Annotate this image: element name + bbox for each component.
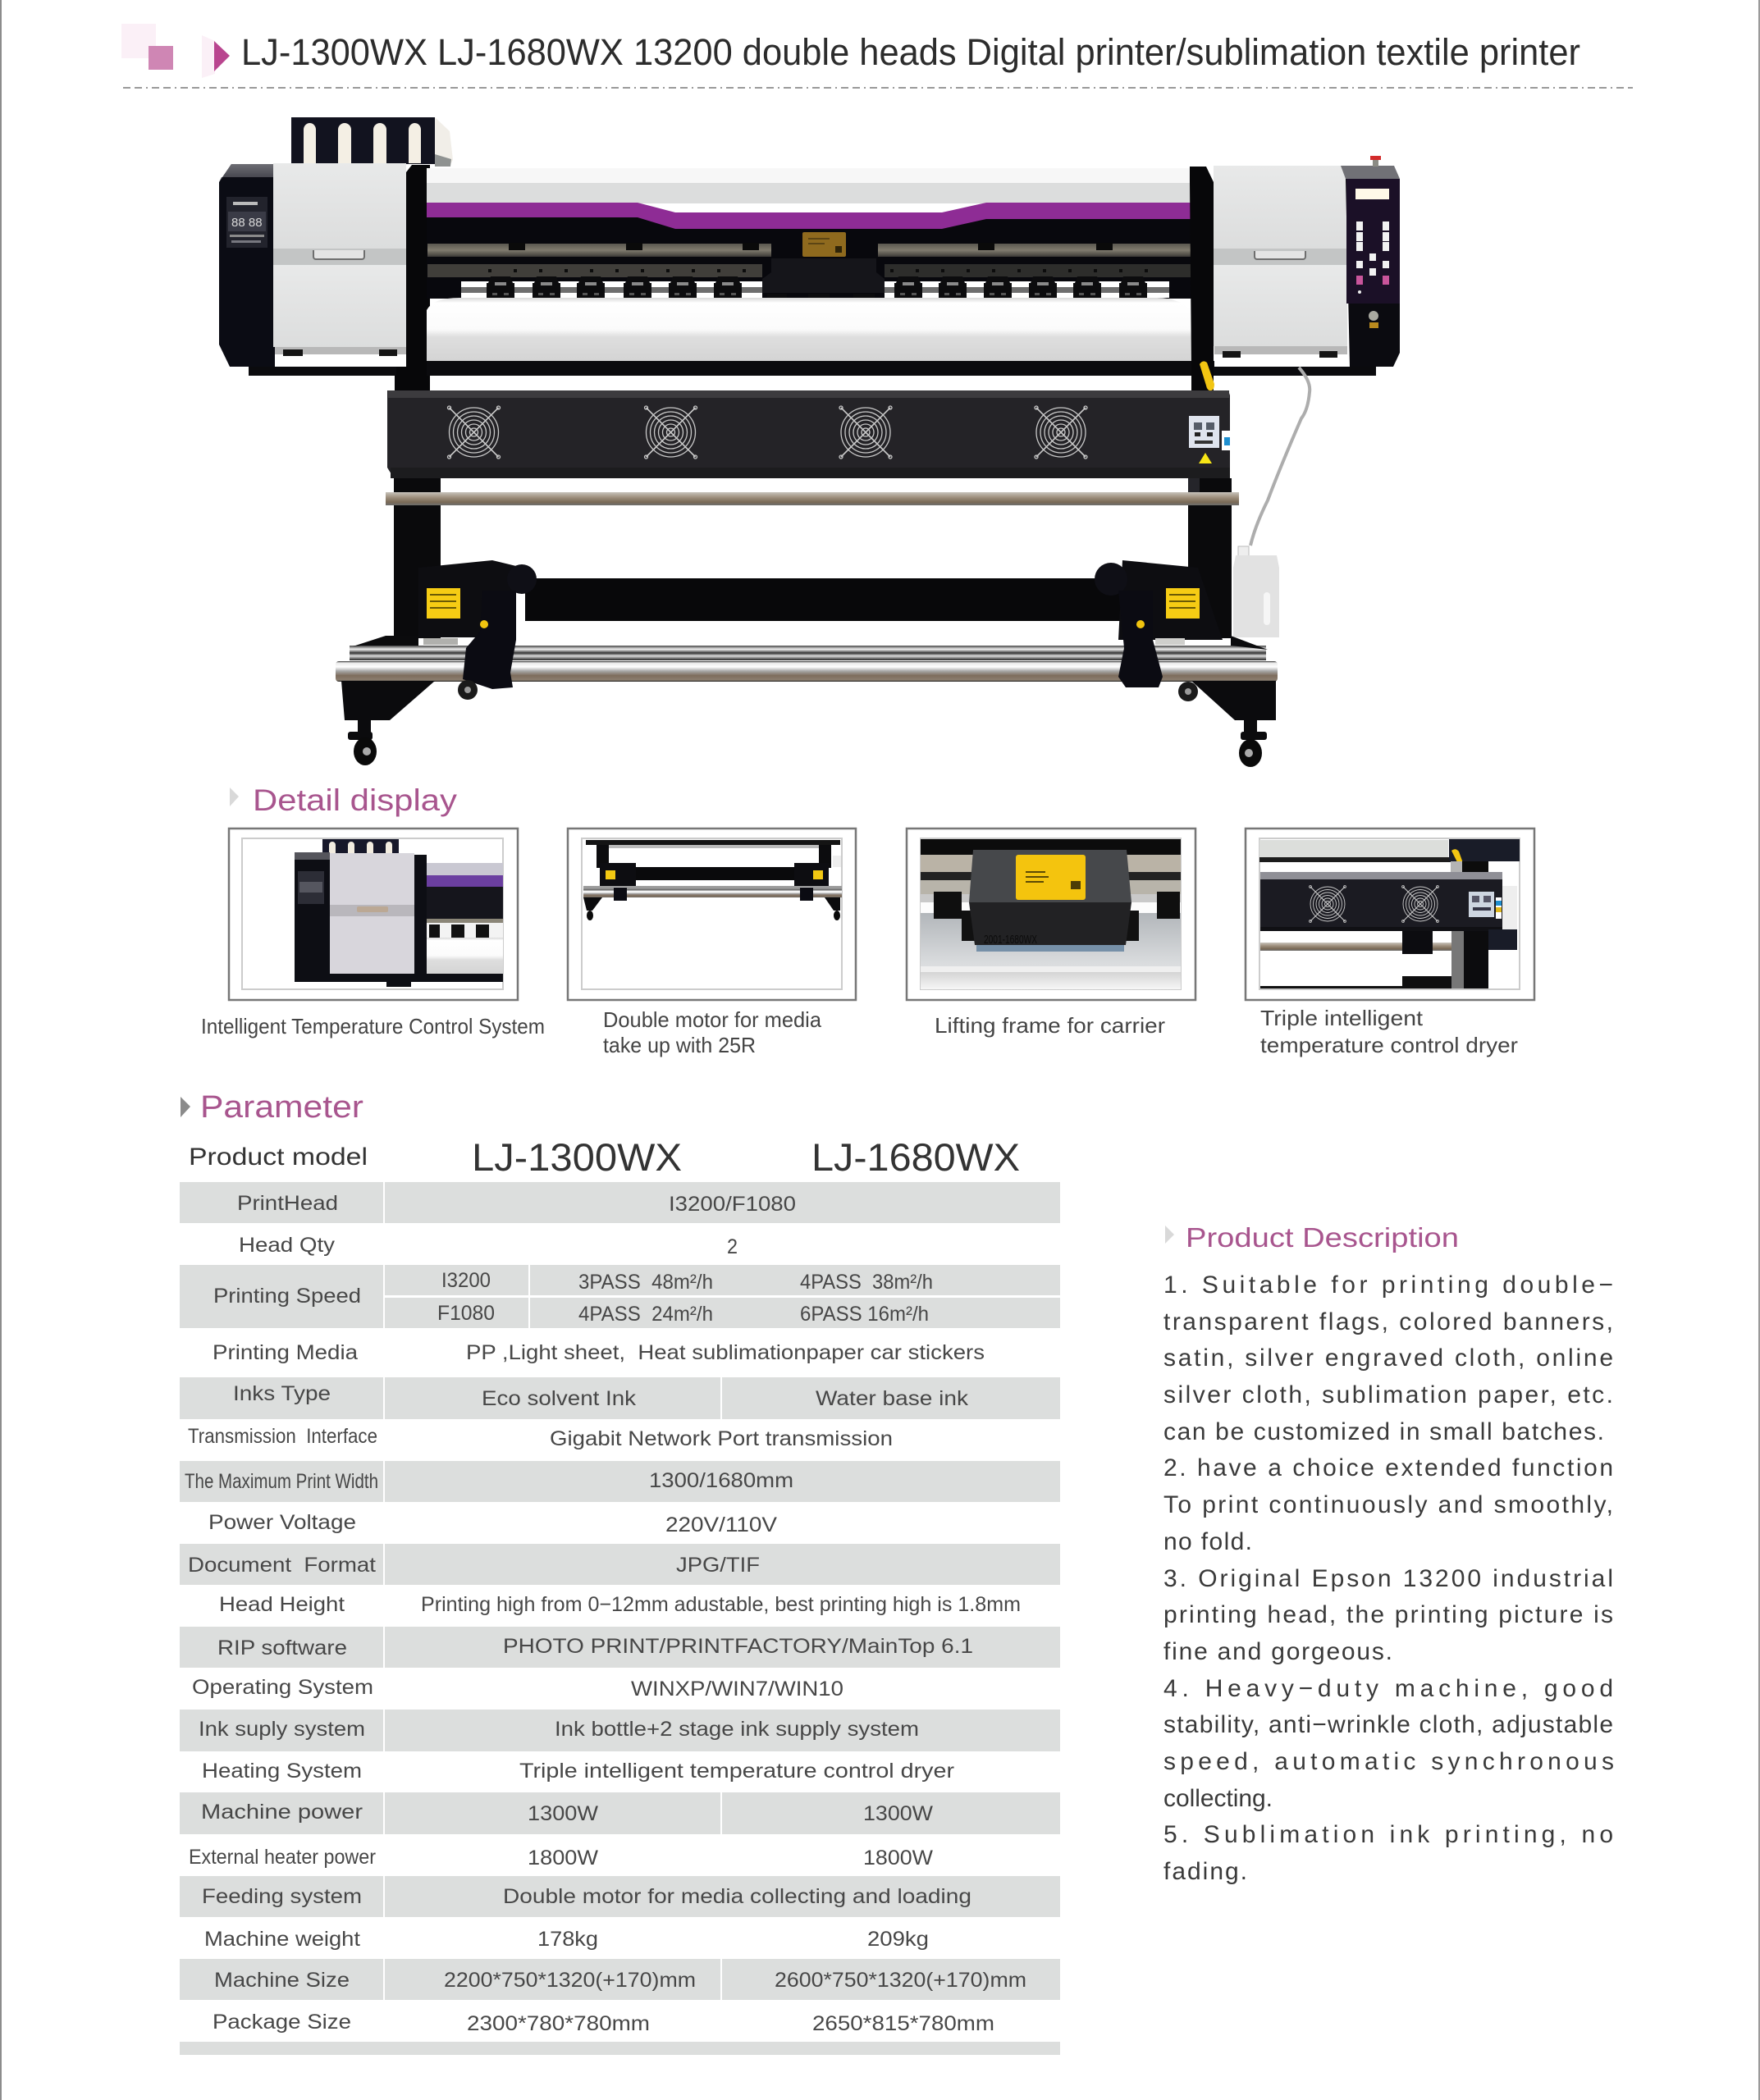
left door [273, 163, 408, 356]
table row: PrintHead: PrintHead [237, 1192, 338, 1215]
product description text: 4. Heavy−duty machine, good [1163, 1675, 1613, 1702]
table row: Package Size: 2650*815*780mm [812, 2012, 994, 2035]
table row: Machine power: 1300W [863, 1802, 933, 1825]
table row: Inks Type: Eco solvent Ink [482, 1387, 637, 1410]
table row: Power Voltage: Power Voltage [208, 1511, 356, 1534]
table row: Printing Speed: 3PASS 48m²/h [578, 1271, 713, 1294]
table row: Printing Speed: F1080 [437, 1302, 495, 1325]
printer illustration [219, 117, 1400, 767]
table row: Printing Speed: I3200 [441, 1269, 491, 1292]
waste tank [1233, 546, 1279, 637]
table header: LJ-1300WX [472, 1135, 682, 1179]
table row: Maximum Print Width: The Maximum Print Width [185, 1470, 378, 1493]
table row: Printing Speed: 6PASS 16m²/h [800, 1303, 929, 1326]
dryer control label [1189, 416, 1219, 448]
table row: Head Qty: 2 [727, 1235, 738, 1258]
panel: lifting frame detail: 2001-1680WX [984, 933, 1037, 947]
table row: Transmission Interface: Gigabit Network Port transmission [550, 1427, 893, 1450]
product description text: 5. Sublimation ink printing, no [1163, 1821, 1613, 1848]
product description text: fading. [1163, 1858, 1247, 1885]
caption: dryer: Triple intelligent [1260, 1006, 1424, 1030]
product description text: collecting. [1163, 1785, 1273, 1812]
table row: Transmission Interface: Transmission Interface [188, 1425, 377, 1448]
product description text: 2. have a choice extended function [1163, 1454, 1613, 1481]
front roller [336, 661, 1278, 682]
table row: Maximum Print Width [180, 1461, 1060, 1502]
table row: PrintHead [180, 1182, 1060, 1223]
table row: Machine Size: Machine Size [214, 1969, 350, 1992]
table row: External heater power [189, 1846, 933, 1869]
table row: RIP software: PHOTO PRINT/PRINTFACTORY/MainTop 6.1 [503, 1635, 973, 1658]
warning triangle [1199, 453, 1212, 463]
product description text: fine and gorgeous. [1163, 1638, 1392, 1665]
product description text: no fold. [1163, 1528, 1252, 1555]
table row: Operating System [192, 1676, 843, 1701]
table row: Printing Media: PP ,Light sheet, Heat sublimationpaper car stickers [466, 1341, 985, 1364]
ink box [291, 117, 453, 167]
product description text: printing head, the printing picture is [1163, 1601, 1613, 1628]
table row: Heating System: Triple intelligent temperature control dryer [519, 1760, 954, 1783]
table header: Product model [189, 1144, 368, 1171]
table row: Document Format: Document Format [188, 1554, 376, 1577]
table row: Maximum Print Width: 1300/1680mm [649, 1469, 793, 1492]
table row: RIP software [180, 1627, 1060, 1668]
table header [189, 1135, 1020, 1179]
dryer bar [387, 390, 1230, 478]
table row: PrintHead: I3200/F1080 [669, 1193, 796, 1216]
product description text [1163, 1271, 1614, 1885]
table row: Ink suply system [180, 1710, 1060, 1751]
product description text: 3. Original Epson 13200 industrial [1163, 1565, 1613, 1592]
table row: Document Format [180, 1544, 1060, 1585]
table row: Power Voltage: 220V/110V [665, 1513, 777, 1536]
supply rod [386, 492, 1239, 505]
cross beam [525, 578, 1132, 621]
carriage [762, 232, 885, 299]
caption: dryer [1260, 1006, 1518, 1057]
left end cap: 88 88 [231, 216, 263, 230]
product description text: can be customized in small batches. [1163, 1418, 1604, 1445]
panel: double motor detail [568, 829, 856, 1000]
dark carriage bay [427, 215, 1193, 299]
product description text: speed, automatic synchronous [1163, 1748, 1614, 1775]
product description heading: Product Description [1186, 1222, 1459, 1253]
yellow handle [1200, 361, 1214, 390]
table row: Ink suply system: Ink suply system [199, 1718, 365, 1741]
table row: Machine Size: 2600*750*1320(+170)mm [775, 1969, 1026, 1992]
table row: Package Size: 2300*780*780mm [467, 2012, 650, 2035]
table row: Operating System: Operating System [192, 1676, 373, 1699]
table row: Machine Size [180, 1959, 1060, 2000]
table row: Transmission Interface [188, 1425, 893, 1450]
right door [1214, 166, 1347, 358]
icon: dryer fan 1 [448, 406, 501, 459]
legs [394, 478, 1232, 638]
title: LJ-1300WX LJ-1680WX 13200 double heads Digital printer/sublimation textile printer [241, 31, 1580, 73]
table row: Printing Media [213, 1341, 985, 1364]
table row: Machine Size: 2200*750*1320(+170)mm [444, 1969, 696, 1992]
icon: dryer fan 3 [839, 406, 892, 459]
table row: Printing Speed: 4PASS 38m²/h [800, 1271, 933, 1294]
parameter heading: Parameter [200, 1090, 363, 1125]
rear roller [350, 646, 1266, 660]
table row: Inks Type: Inks Type [233, 1382, 331, 1405]
table row: Head Height: Printing high from 0−12mm adustable, best printing high is 1.8mm [421, 1593, 1021, 1616]
table row: Printing Speed [180, 1265, 1060, 1328]
table row: Inks Type [180, 1377, 1060, 1419]
under-frame [249, 167, 1376, 391]
panel: dryer detail [1246, 829, 1534, 1000]
icon: dryer fan 4 [1035, 406, 1087, 459]
left post [395, 165, 430, 391]
icon: dryer fan 2 [645, 406, 697, 459]
table row: Head Qty [239, 1234, 738, 1258]
rails [427, 243, 1192, 277]
right control panel [1341, 156, 1400, 367]
title bar [121, 24, 1580, 78]
table row: Printing Speed: Printing Speed [213, 1285, 361, 1308]
table row: Machine weight [204, 1928, 929, 1951]
table row: RIP software: RIP software [217, 1637, 347, 1659]
table row: Head Qty: Head Qty [239, 1234, 336, 1257]
pinch rollers [487, 276, 1147, 298]
table row: Machine weight: 209kg [867, 1928, 929, 1951]
left end cap [219, 164, 275, 367]
caption: temperature control: Intelligent Temperature Control System [201, 1014, 545, 1039]
table row: Inks Type: Water base ink [816, 1387, 969, 1410]
table row: External heater power: 1800W [528, 1847, 598, 1869]
left foot and caster [341, 636, 478, 765]
table row: Heating System [202, 1760, 954, 1783]
caption: double motor: Double motor for media [603, 1007, 822, 1032]
right take-up motor [1095, 560, 1223, 687]
product description text: satin, silver engraved cloth, online [1163, 1344, 1613, 1372]
product description text: silver cloth, sublimation paper, etc. [1163, 1381, 1613, 1408]
table row: Operating System: WINXP/WIN7/WIN10 [631, 1678, 843, 1701]
table row: Printing Speed: 4PASS 24m²/h [578, 1303, 713, 1326]
product description text: stability, anti−wrinkle cloth, adjustable [1163, 1711, 1613, 1738]
product description text: To print continuously and smoothly, [1163, 1491, 1613, 1518]
table row: Package Size [213, 2011, 994, 2035]
detail display heading: Detail display [253, 783, 458, 817]
left take-up motor [418, 560, 537, 689]
table row: Feeding system: Double motor for media collecting and loading [503, 1885, 971, 1908]
panel: lifting frame detail [907, 829, 1195, 1000]
table row: Power Voltage [208, 1511, 777, 1536]
table row: Head Height: Head Height [219, 1593, 345, 1616]
table row: Package Size: Package Size [213, 2011, 351, 2034]
top cover [427, 168, 1193, 203]
product description text: transparent flags, colored banners, [1163, 1308, 1613, 1335]
table row: Ink suply system: Ink bottle+2 stage ink supply system [555, 1718, 919, 1741]
table row: Document Format: JPG/TIF [676, 1554, 760, 1577]
product description text: 1. Suitable for printing double− [1163, 1271, 1613, 1299]
table row: Feeding system [180, 1876, 1060, 1917]
table row: External heater power: 1800W [863, 1847, 933, 1869]
table row: External heater power: External heater power [189, 1846, 376, 1869]
caption: lifting frame: Lifting frame for carrier [935, 1013, 1165, 1038]
platen [427, 298, 1194, 361]
icon: pink squares [121, 24, 173, 70]
caption: double motor [603, 1007, 822, 1057]
table header: LJ-1680WX [811, 1135, 1020, 1179]
table row: Machine weight: Machine weight [204, 1928, 360, 1951]
parameter table [180, 1135, 1060, 2055]
table row: Heating System: Heating System [202, 1760, 362, 1783]
panel: temperature control detail [229, 829, 518, 1000]
table row: Printing Media: Printing Media [213, 1341, 358, 1364]
purple stripe [427, 203, 1192, 229]
table row: Machine weight: 178kg [537, 1928, 598, 1951]
table row: Feeding system: Feeding system [202, 1885, 362, 1908]
table row: Machine power: 1300W [528, 1802, 598, 1825]
caption: dryer: temperature control dryer [1260, 1033, 1518, 1057]
table row: Machine power: Machine power [201, 1801, 363, 1824]
caption: double motor: take up with 25R [603, 1033, 756, 1057]
right foot and caster [1178, 636, 1276, 767]
media path slots [461, 281, 1169, 298]
ink hose [1250, 368, 1310, 546]
table row: Machine power [180, 1792, 1060, 1834]
icon: title arrow [202, 35, 230, 78]
